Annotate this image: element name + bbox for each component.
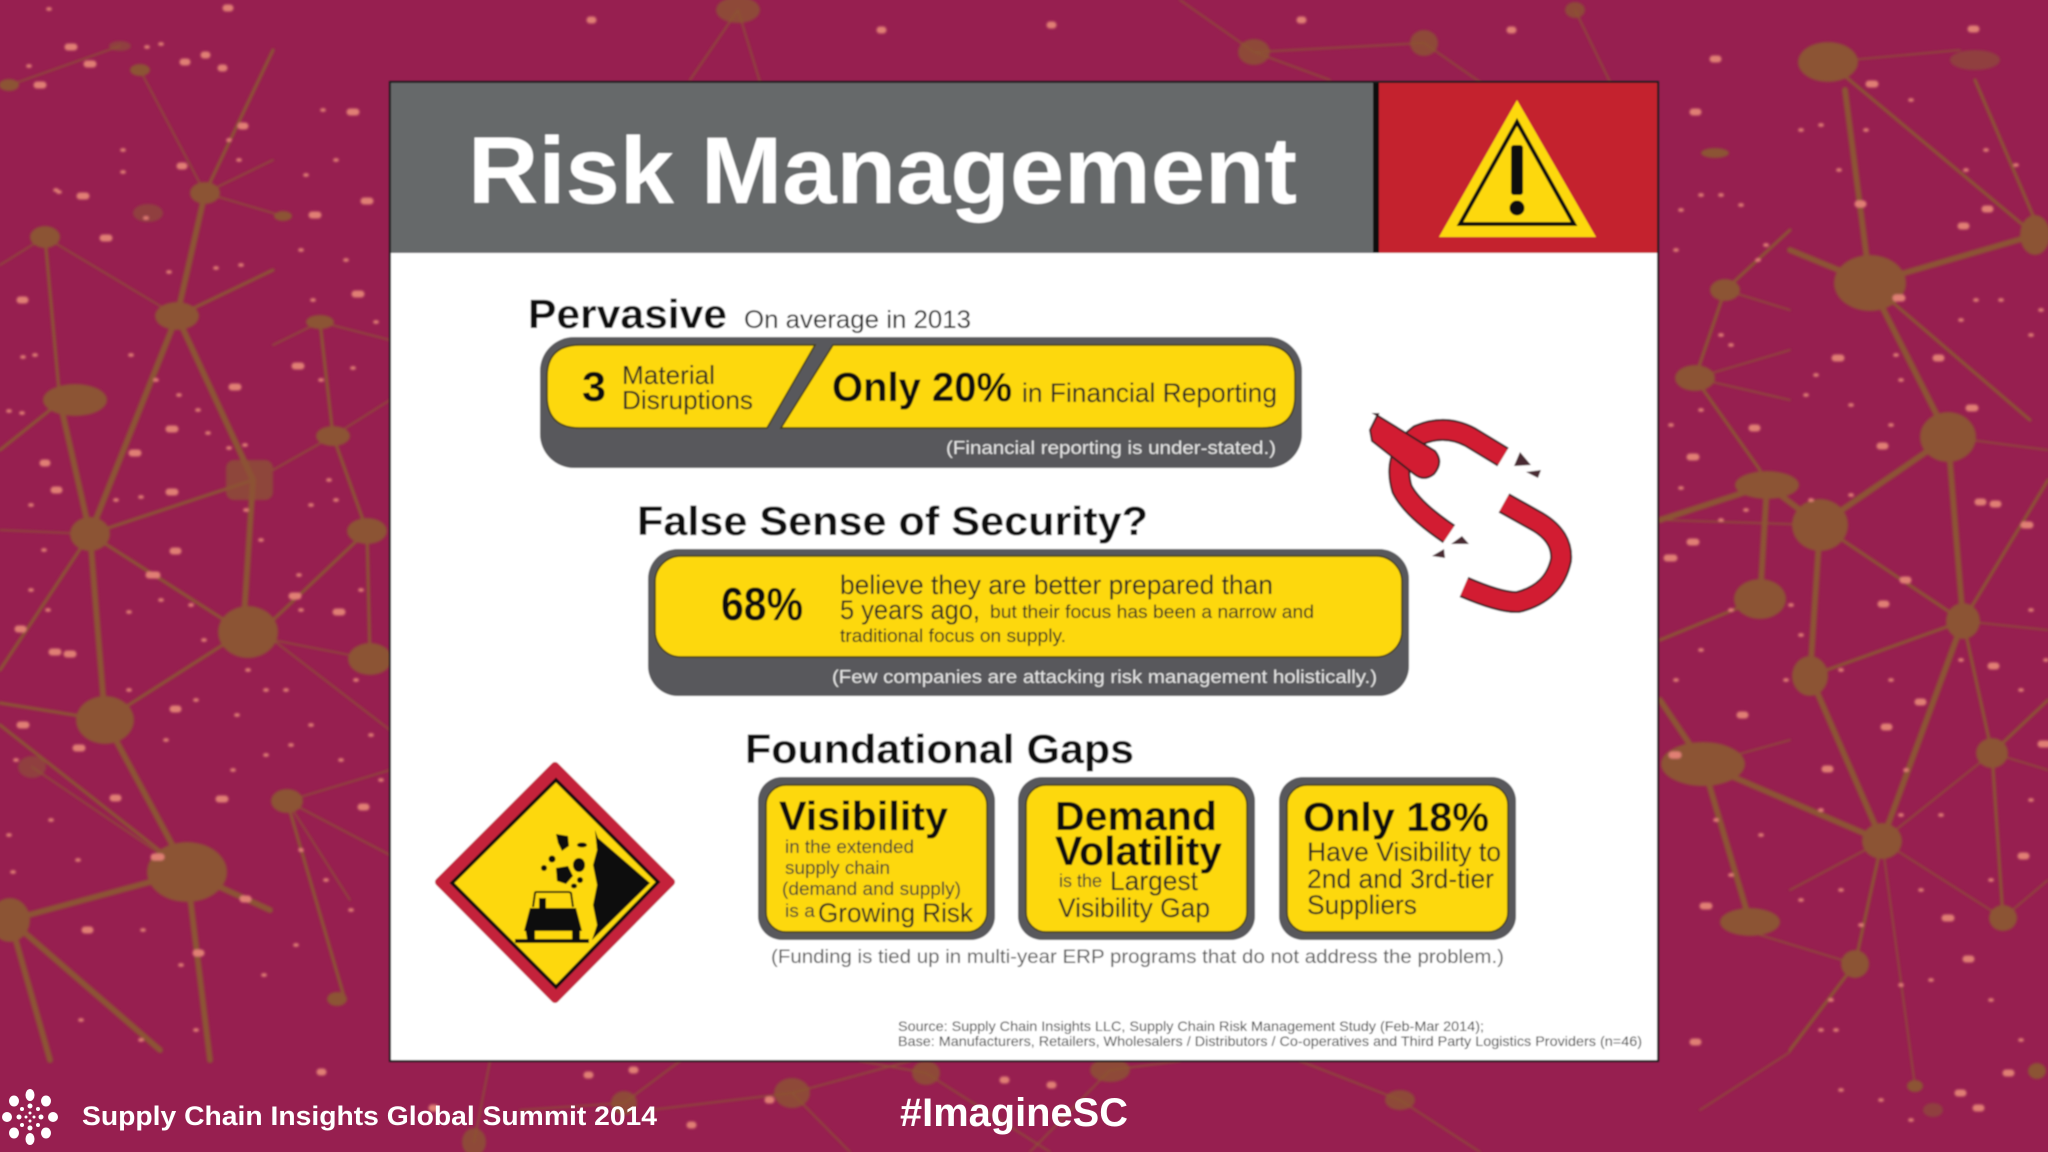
section: pervasive — [528, 291, 1302, 468]
source note: Base: Manufacturers, Retailers, Wholesalers / Distributors / Co-operatives and Third Party Logistics Providers (n=46) — [898, 1033, 1642, 1049]
note: understated: (Financial reporting is under-stated.) — [946, 438, 1276, 458]
card: demand volatility: is the — [1059, 871, 1102, 891]
card: only 18 percent: 2nd and 3rd-tier — [1307, 864, 1494, 894]
stat: 3 material disruptions: Material — [622, 360, 715, 390]
card: only 18 percent: Suppliers — [1307, 890, 1417, 920]
icon: falling rocks road sign — [439, 766, 671, 999]
card: demand volatility: Demand — [1055, 793, 1217, 839]
panel: risk management infographic — [390, 82, 1658, 1061]
card: demand volatility: Visibility Gap — [1058, 893, 1210, 923]
title: Risk Management — [468, 118, 1297, 224]
hashtag: #ImagineSC — [900, 1091, 1128, 1135]
event name: Supply Chain Insights Global Summit 2014 — [82, 1101, 657, 1131]
card: visibility: Visibility — [779, 793, 948, 839]
section: false sense of security — [637, 498, 1409, 696]
stat: only 20 percent: Only 20% — [832, 364, 1012, 410]
card: demand volatility: Volatility — [1055, 828, 1222, 874]
pill: disruptions versus reporting — [540, 337, 1302, 468]
stat: 68 percent: 68% — [721, 578, 803, 630]
header band — [391, 83, 1657, 253]
stat: 3 material disruptions: 3 — [582, 363, 606, 410]
text: belief statement: 5 years ago, — [840, 595, 980, 625]
stat: 3 material disruptions — [582, 360, 753, 415]
stat: only 20 percent: in Financial Reporting — [1022, 378, 1277, 408]
source note: Source: Supply Chain Insights LLC, Supply Chain Risk Management Study (Feb-Mar 2014); — [898, 1018, 1484, 1034]
pill: 68 percent — [648, 549, 1409, 696]
footer — [2, 1089, 1128, 1145]
source note — [898, 1018, 1642, 1049]
card: only 18 percent: Have Visibility to — [1307, 837, 1501, 867]
stat: 3 material disruptions: Disruptions — [622, 385, 753, 415]
heading: foundational gaps: Foundational Gaps — [745, 726, 1134, 772]
note: funding: (Funding is tied up in multi-year ERP programs that do not address the problem.) — [771, 947, 1504, 968]
text: belief statement: believe they are better prepared than — [840, 570, 1273, 600]
heading: pervasive: Pervasive — [528, 291, 727, 337]
icon: broken chain link — [1370, 414, 1561, 602]
card: visibility: supply chain — [785, 857, 890, 878]
card: visibility — [758, 777, 995, 940]
card: demand volatility: Largest — [1110, 866, 1198, 896]
heading: false sense of security: False Sense of Security? — [637, 498, 1148, 544]
text: belief statement: traditional focus on supply. — [840, 625, 1066, 646]
text: belief statement: but their focus has been a narrow and — [990, 601, 1314, 622]
card: visibility: Growing Risk — [818, 898, 973, 928]
note: few companies: (Few companies are attacking risk management holistically.) — [832, 667, 1377, 687]
card: visibility: in the extended — [785, 836, 914, 857]
text: belief statement — [840, 570, 1314, 646]
stat: only 20 percent — [832, 364, 1277, 410]
subheading: on average: On average in 2013 — [744, 306, 971, 334]
card: visibility: is a — [785, 901, 816, 921]
card: demand volatility — [1018, 777, 1255, 940]
card: only 18 percent — [1279, 777, 1516, 940]
icon: summit logo — [2, 1089, 58, 1145]
card: only 18 percent: Only 18% — [1303, 794, 1489, 840]
section: foundational gaps — [745, 726, 1516, 968]
card: visibility: (demand and supply) — [782, 878, 961, 899]
icon: warning triangle — [1439, 100, 1596, 237]
